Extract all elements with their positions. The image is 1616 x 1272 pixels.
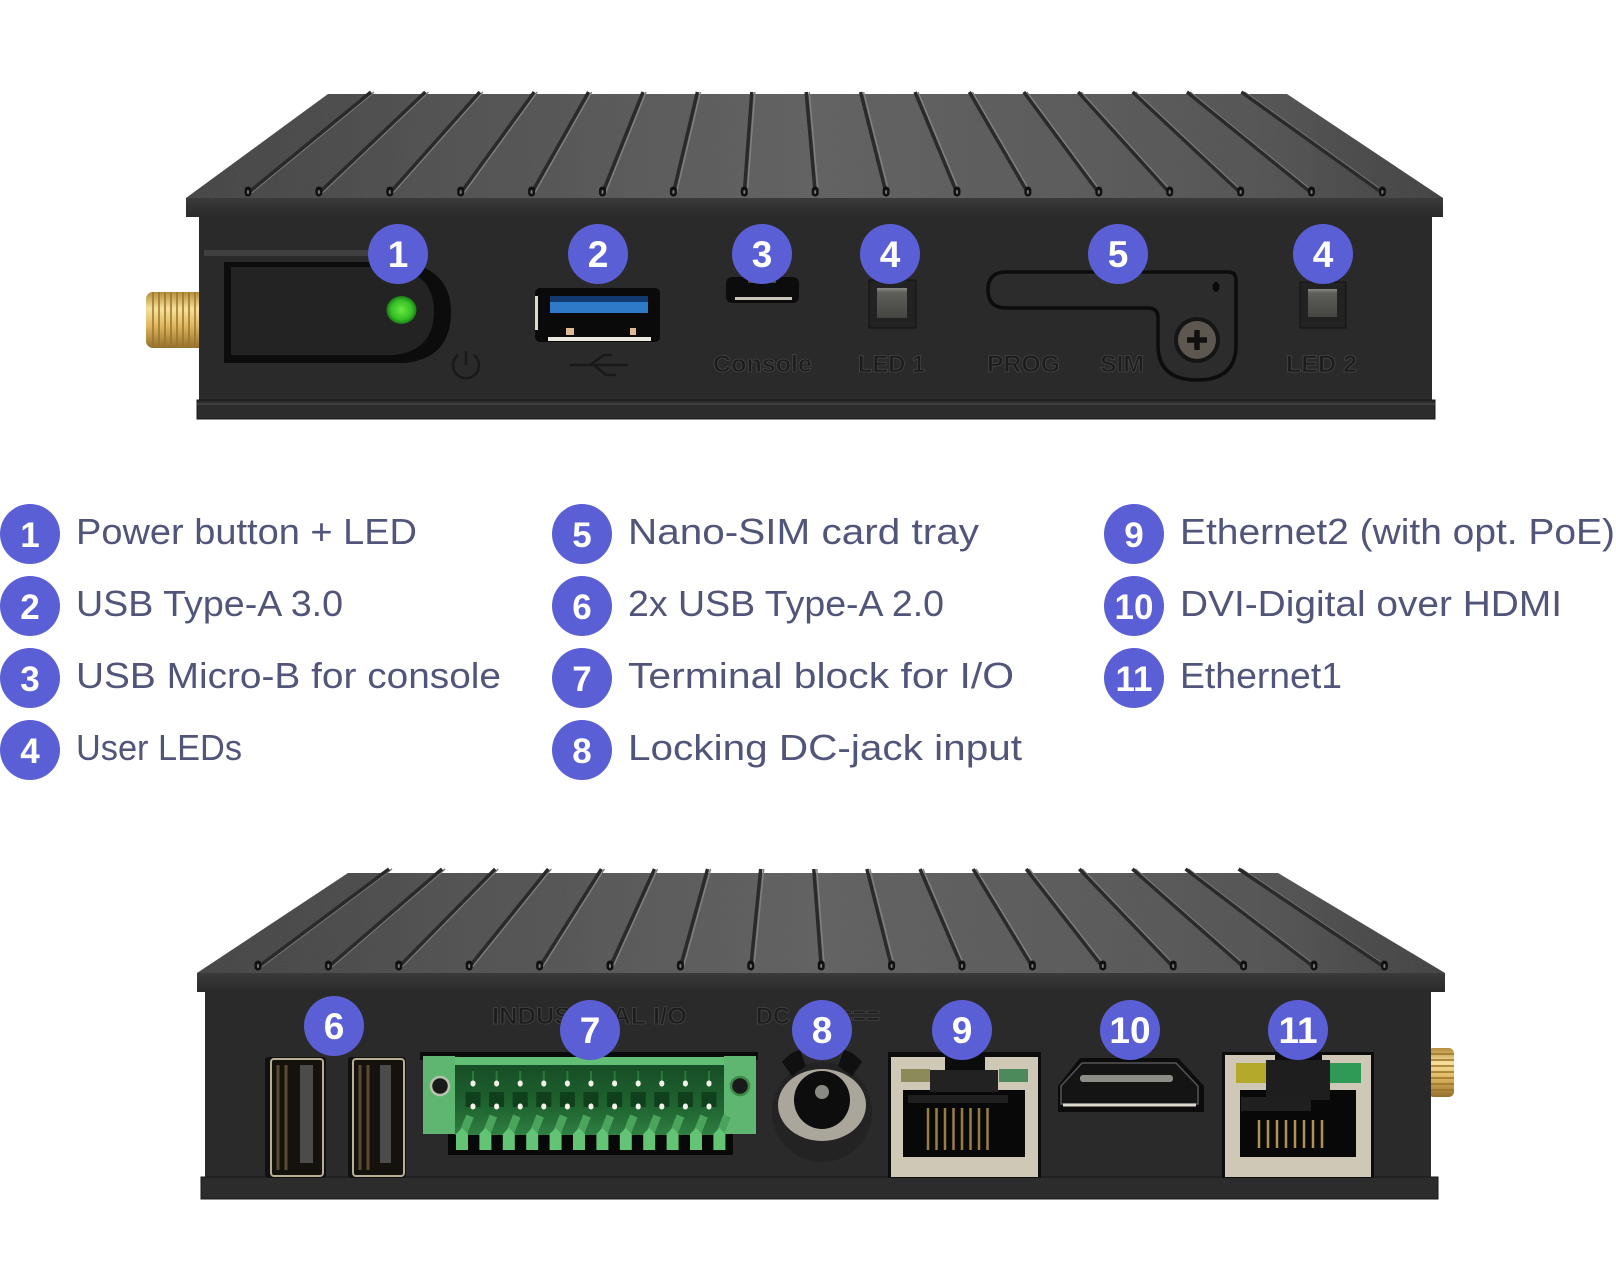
LED 2 window <box>1300 282 1346 328</box>
LED 1 window <box>869 280 916 328</box>
legend item 1 <box>0 504 417 564</box>
legend item 11: Ethernet1 <box>1180 655 1342 696</box>
badge 7 <box>560 1000 620 1060</box>
SIM tray <box>988 272 1236 380</box>
top face with cooling ribs <box>197 869 1445 973</box>
badge 11: 11 <box>1278 1010 1318 1051</box>
USB 2.0 port B <box>348 1057 406 1178</box>
Ethernet port 1 <box>1222 1052 1374 1178</box>
legend item 5 <box>552 504 979 564</box>
body front panel <box>186 198 1443 419</box>
badge 10: 10 <box>1109 1010 1151 1051</box>
legend item 7 <box>552 648 1014 708</box>
legend item 9: 9 <box>1124 516 1144 555</box>
badge 4 (LED 1) <box>860 224 920 284</box>
embossed label: Console: Console <box>713 351 812 378</box>
legend <box>0 504 1615 780</box>
legend item 3: 3 <box>20 660 40 699</box>
legend item 9: Ethernet2 (with opt. PoE) <box>1180 511 1615 552</box>
legend item 2 <box>0 576 343 636</box>
legend item 8: Locking DC-jack input <box>628 727 1022 768</box>
legend item 1: Power button + LED <box>76 511 417 552</box>
embossed label: DC input: DC 12V=== <box>756 1003 880 1030</box>
legend item 4 <box>0 720 242 780</box>
USB 2.0 port A <box>265 1057 326 1178</box>
badge 2: 2 <box>588 234 608 275</box>
legend item 10: DVI-Digital over HDMI <box>1180 583 1562 624</box>
device: front view (top) <box>146 92 1443 419</box>
legend item 2: 2 <box>20 588 40 627</box>
legend item 2: USB Type-A 3.0 <box>76 583 343 624</box>
legend item 4: User LEDs <box>76 727 242 768</box>
badge 8: 8 <box>812 1010 832 1051</box>
power symbol <box>453 351 479 378</box>
badge 3 <box>732 224 792 284</box>
legend item 9 <box>1104 504 1615 564</box>
badge 8 <box>792 1000 852 1060</box>
embossed label: PROG: PROG <box>987 351 1060 378</box>
body rear panel <box>197 973 1445 1199</box>
badge 11 <box>1268 1000 1328 1060</box>
badge 4 (LED 2): 4 <box>1313 234 1334 275</box>
legend item 8: 8 <box>572 732 592 771</box>
legend item 6: 6 <box>572 588 592 627</box>
legend item 11 <box>1104 648 1342 708</box>
badge 3: 3 <box>752 234 772 275</box>
embossed label: LED 1: LED 1 <box>858 351 925 378</box>
badge 9: 9 <box>952 1010 972 1051</box>
legend item 11: 11 <box>1116 660 1152 699</box>
legend item 6 <box>552 576 944 636</box>
badge 9 <box>932 1000 992 1060</box>
badge 10 <box>1100 1000 1160 1060</box>
legend item 8 <box>552 720 1022 780</box>
legend item 3 <box>0 648 501 708</box>
legend item 7: 7 <box>572 660 592 699</box>
power button with green LED <box>204 250 451 363</box>
legend item 6: 2x USB Type-A 2.0 <box>628 583 944 624</box>
badge 5: 5 <box>1108 234 1128 275</box>
embossed label: LED 2: LED 2 <box>1286 351 1357 378</box>
legend item 5: Nano-SIM card tray <box>628 511 979 552</box>
legend item 7: Terminal block for I/O <box>628 655 1014 696</box>
legend item 4: 4 <box>20 732 40 771</box>
badge 2 <box>568 224 628 284</box>
badge 4 (LED 1): 4 <box>880 234 901 275</box>
legend item 3: USB Micro-B for console <box>76 655 501 696</box>
badge 6: 6 <box>324 1006 344 1047</box>
DC jack <box>772 1050 872 1162</box>
badge 1: 1 <box>388 234 408 275</box>
embossed label: INDUSTRIAL I/O: INDUSTRIAL I/O <box>492 1003 687 1030</box>
USB 3.0 port <box>535 288 660 342</box>
USB symbol <box>570 355 628 375</box>
legend item 10: 10 <box>1115 588 1153 627</box>
badge 4 (LED 2) <box>1293 224 1353 284</box>
top face with cooling ribs <box>186 92 1443 198</box>
antenna connector (left) <box>146 292 208 348</box>
legend item 5: 5 <box>572 516 592 555</box>
badge 1 <box>368 224 428 284</box>
legend item 1: 1 <box>20 516 40 555</box>
embossed label: SIM: SIM <box>1100 351 1144 378</box>
device: rear view (bottom) <box>197 869 1454 1199</box>
badge 5 <box>1088 224 1148 284</box>
legend item 10 <box>1104 576 1562 636</box>
badge 6 <box>304 996 364 1056</box>
HDMI port <box>1058 1058 1204 1112</box>
green terminal block <box>420 1052 758 1155</box>
Ethernet port 2 <box>888 1052 1041 1178</box>
antenna connector (right) <box>1428 1048 1454 1097</box>
micro USB console port <box>726 277 799 303</box>
badge 7: 7 <box>580 1010 600 1051</box>
